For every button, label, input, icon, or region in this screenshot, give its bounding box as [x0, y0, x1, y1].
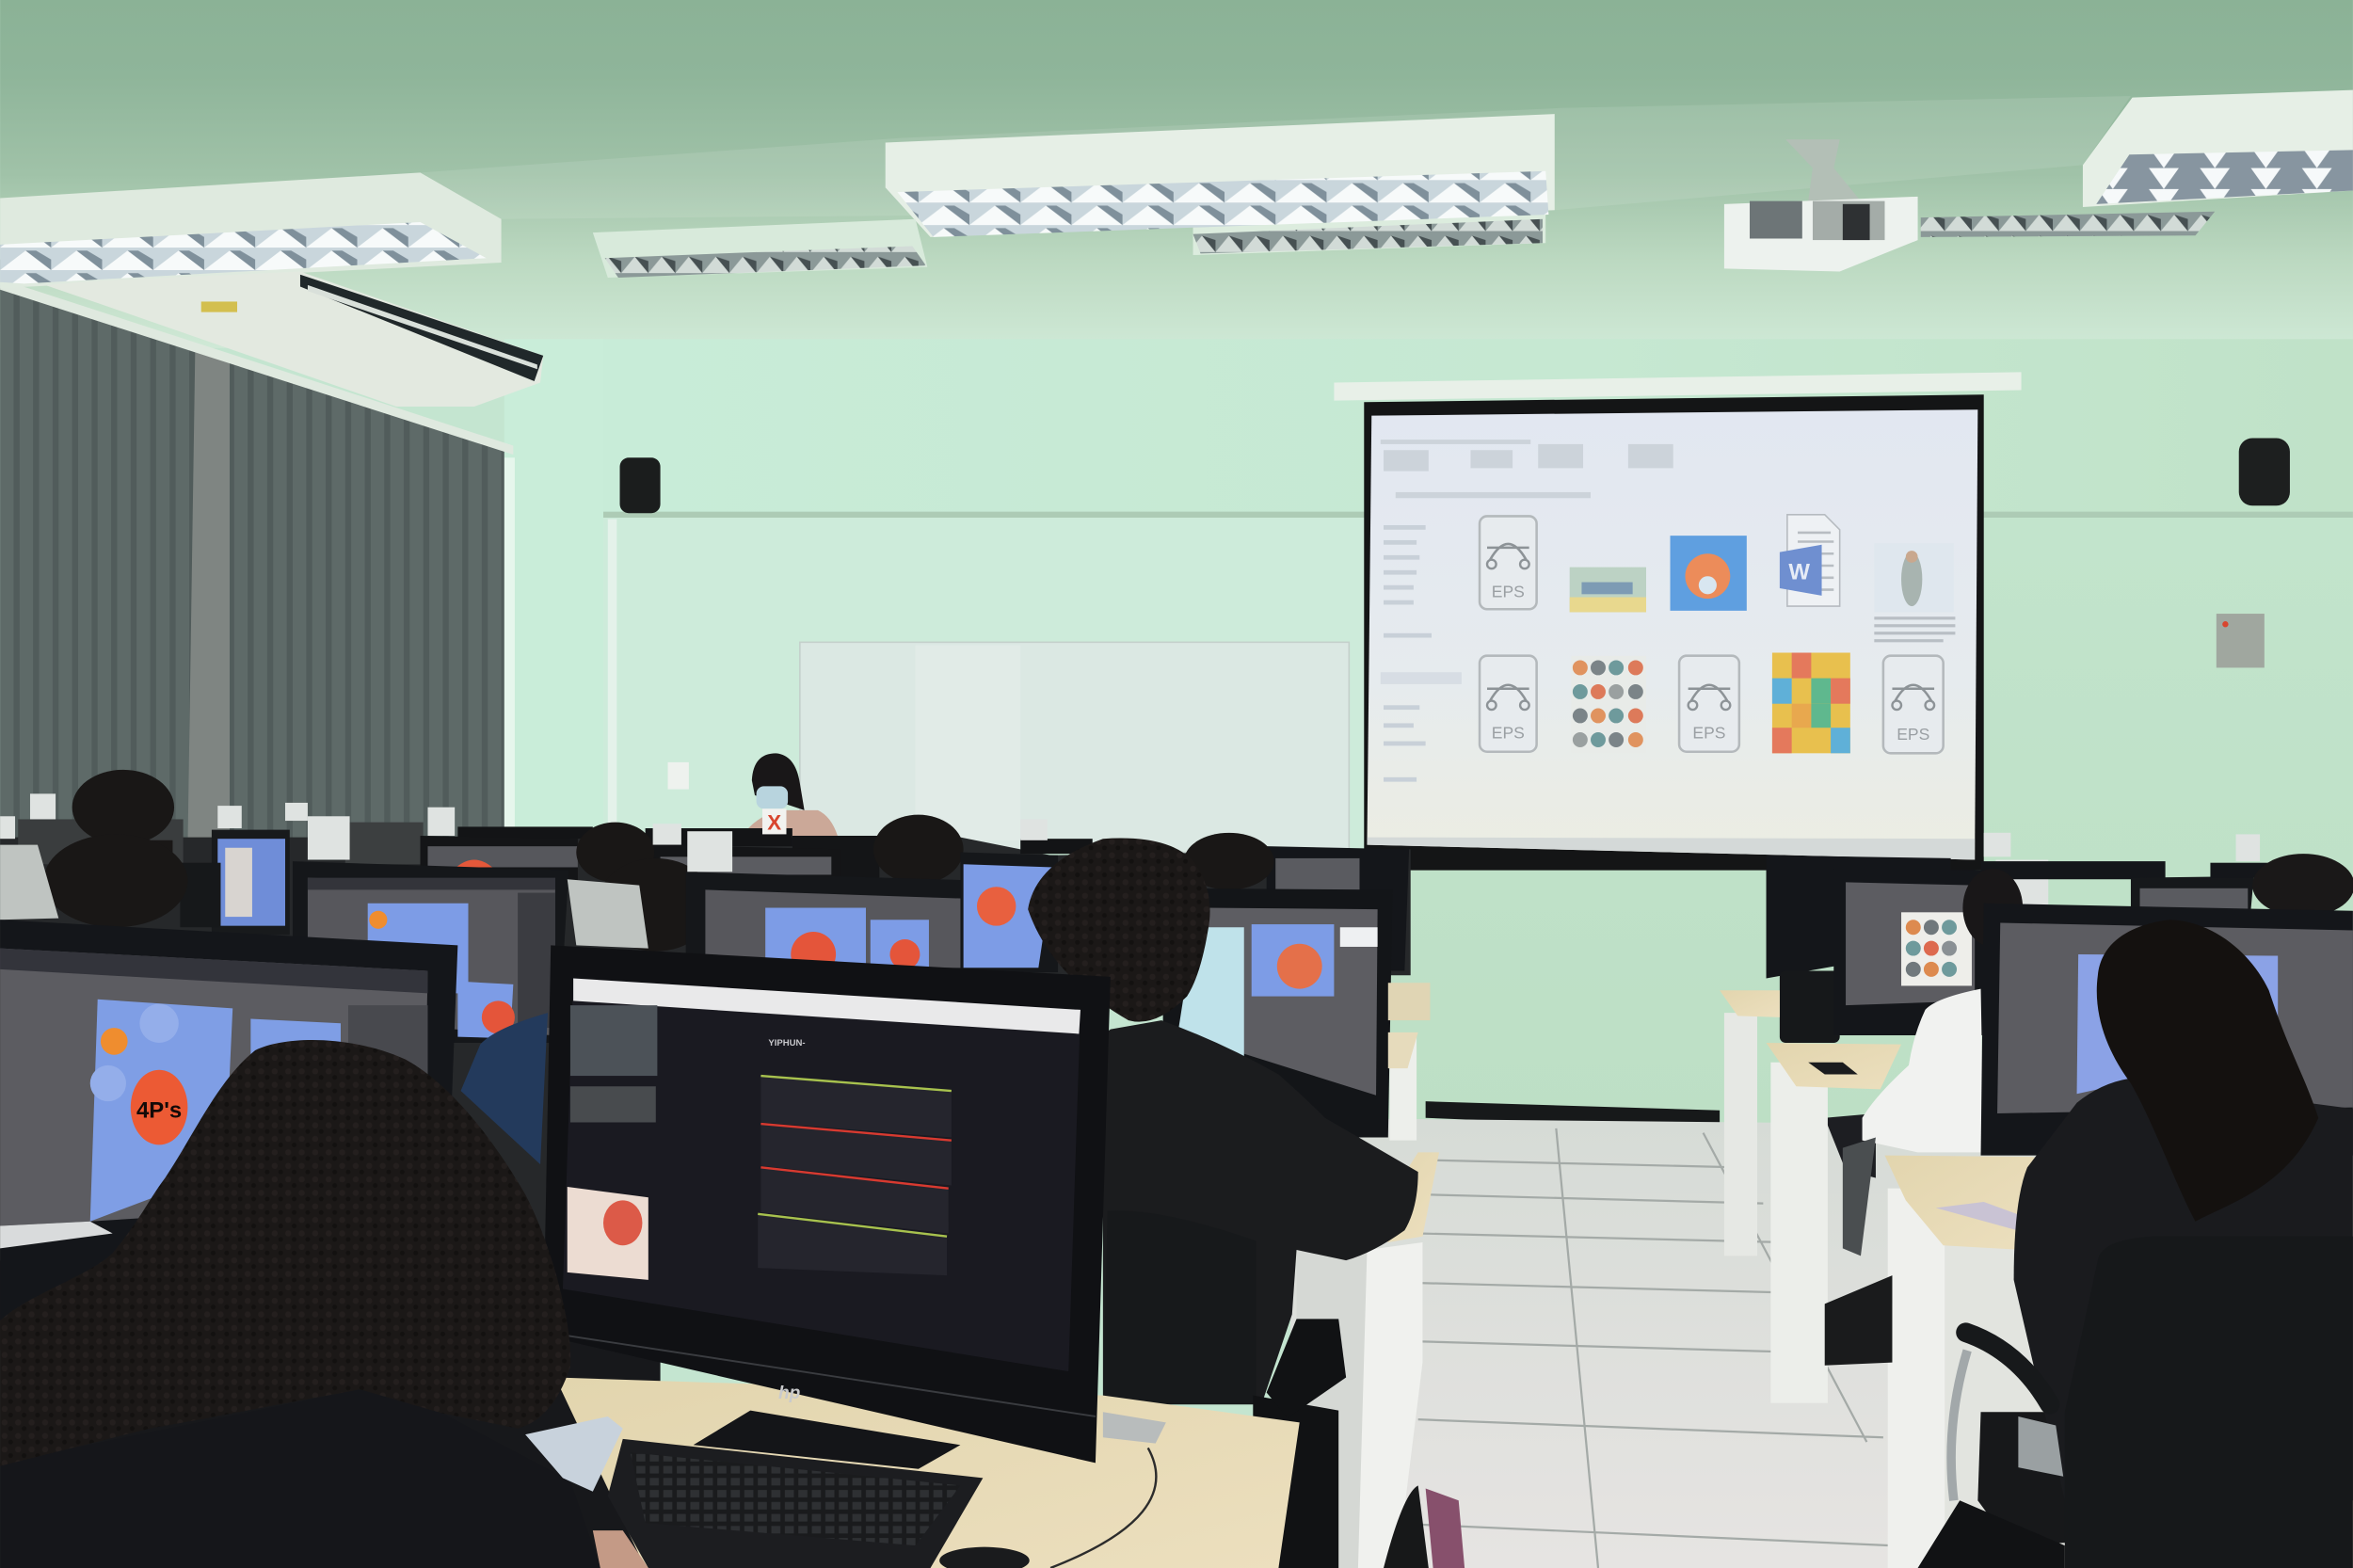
monitor stand [694, 1411, 960, 1469]
bag on floor [1384, 1485, 1465, 1568]
notebook on desk [1936, 1202, 2029, 1232]
file icons grid [1480, 515, 1955, 753]
icon: EPS file 4: EPS [1897, 725, 1929, 744]
icon: EPS file 1 [1480, 516, 1537, 609]
front desk [555, 1378, 1300, 1568]
cable port [1103, 1412, 1166, 1444]
screen housing [1334, 372, 2022, 401]
poster title badge [131, 1070, 187, 1144]
monitor: far right [1981, 904, 2353, 1156]
ceiling [0, 0, 2353, 348]
mouse [939, 1547, 1030, 1568]
desks: right column [1720, 990, 2353, 1568]
seated students, back rows [43, 770, 1274, 952]
monitor: row 2 centre [686, 872, 986, 977]
teacher [738, 753, 840, 846]
monitor: right, back [1767, 856, 2270, 978]
chair chrome: white-shirt student [1843, 1137, 1876, 1256]
monitor: right, with icon sheet [1833, 869, 1985, 1035]
lower-left dark base [0, 1260, 661, 1568]
paper stands [0, 793, 2260, 949]
icon: EPS file 3: EPS [1692, 723, 1725, 742]
ceiling beam [420, 96, 2131, 219]
monitor: centre right [1163, 888, 1393, 1137]
icon: word document: W [1788, 559, 1810, 584]
monitor: front left [0, 920, 457, 1320]
chair: centre [1103, 1210, 1346, 1568]
ceiling light: far centre [1193, 219, 1543, 253]
wall lower left [603, 516, 1384, 854]
ceiling light: far left [605, 246, 926, 278]
column [504, 339, 603, 849]
icon: blue poster thumbnail [1671, 536, 1747, 611]
curtain pale slat [187, 351, 230, 849]
wall light switch [668, 762, 689, 790]
column highlight [504, 457, 515, 848]
back row monitors [18, 819, 1409, 970]
projector [1724, 139, 1918, 272]
student: right row, white shirt [1825, 869, 2023, 1177]
student: centre, dark jacket [1103, 1020, 1418, 1403]
monitor: row 2 left [293, 861, 568, 1043]
air conditioner [45, 272, 543, 407]
icon: round icons sheet [1571, 656, 1646, 753]
icon: EPS file 1: EPS [1492, 583, 1525, 601]
wall lower right [1381, 516, 2353, 1124]
curtain [0, 285, 504, 849]
blog cards [758, 1076, 952, 1275]
file explorer sidebar [1381, 525, 1462, 782]
poster title badge: 4P's [136, 1098, 182, 1124]
icon: EPS file 2: EPS [1492, 723, 1525, 742]
monitor: row 2 small [960, 853, 1058, 972]
student: front left hair [0, 1040, 570, 1466]
curtain rail [0, 280, 513, 455]
whiteboard [800, 642, 1349, 853]
phone on desk [1808, 1063, 1858, 1074]
student: front right bag [1977, 1412, 2071, 1545]
icon: portrait thumbnail [1874, 543, 1954, 612]
projection screen [1364, 394, 1984, 871]
chair: right back row [1780, 970, 1840, 1043]
back wall upper [600, 339, 2353, 516]
file explorer toolbar [1381, 440, 1673, 498]
wall skirting [1426, 1101, 1720, 1129]
phone [525, 1416, 623, 1492]
icon: colourful tile sheet [1772, 653, 1850, 753]
icon: EPS file 4 [1883, 656, 1944, 753]
ceiling light: far right [1921, 212, 2215, 237]
student: centre hair [1028, 839, 1210, 1022]
chair: front right [1918, 1237, 2353, 1568]
desks: centre column [1297, 983, 1439, 1568]
speaker right [2239, 439, 2290, 505]
exam card with X: X [767, 811, 781, 835]
bezel line [566, 1336, 1096, 1416]
ceiling light: centre [897, 171, 1548, 237]
icon: EPS file 3 [1679, 656, 1739, 752]
ceiling light: left [0, 222, 487, 283]
student: front left shirt [0, 1389, 600, 1568]
speaker left [620, 457, 661, 513]
monitor: front centre [543, 945, 1111, 1463]
student: far right head [2252, 854, 2353, 917]
student: front right jacket [2014, 1079, 2353, 1500]
cable [1050, 1448, 1156, 1568]
backpack on floor [1825, 1275, 1892, 1366]
post thumbnails [568, 1005, 657, 1280]
portrait caption [1874, 616, 1955, 642]
student: front left arm [593, 1530, 648, 1568]
wall switch box [2217, 614, 2265, 667]
exam card with X [762, 808, 786, 835]
back row dark base [0, 838, 1411, 1351]
hp logo: hp [778, 1384, 801, 1403]
wall rail [603, 512, 2353, 518]
wall pipe [608, 520, 616, 841]
keyboard [608, 1439, 983, 1568]
student: left, blue shirt [461, 1013, 548, 1164]
ceiling light: right [2096, 150, 2353, 204]
ceiling panels [0, 90, 2353, 288]
icon: banner thumbnail [1570, 568, 1646, 612]
student: front right hair [2097, 920, 2318, 1222]
floor [1290, 1118, 2353, 1568]
icon: EPS file 2 [1480, 656, 1537, 752]
page heading: YIPHUN- [768, 1038, 806, 1048]
icon: word document [1780, 515, 1840, 606]
